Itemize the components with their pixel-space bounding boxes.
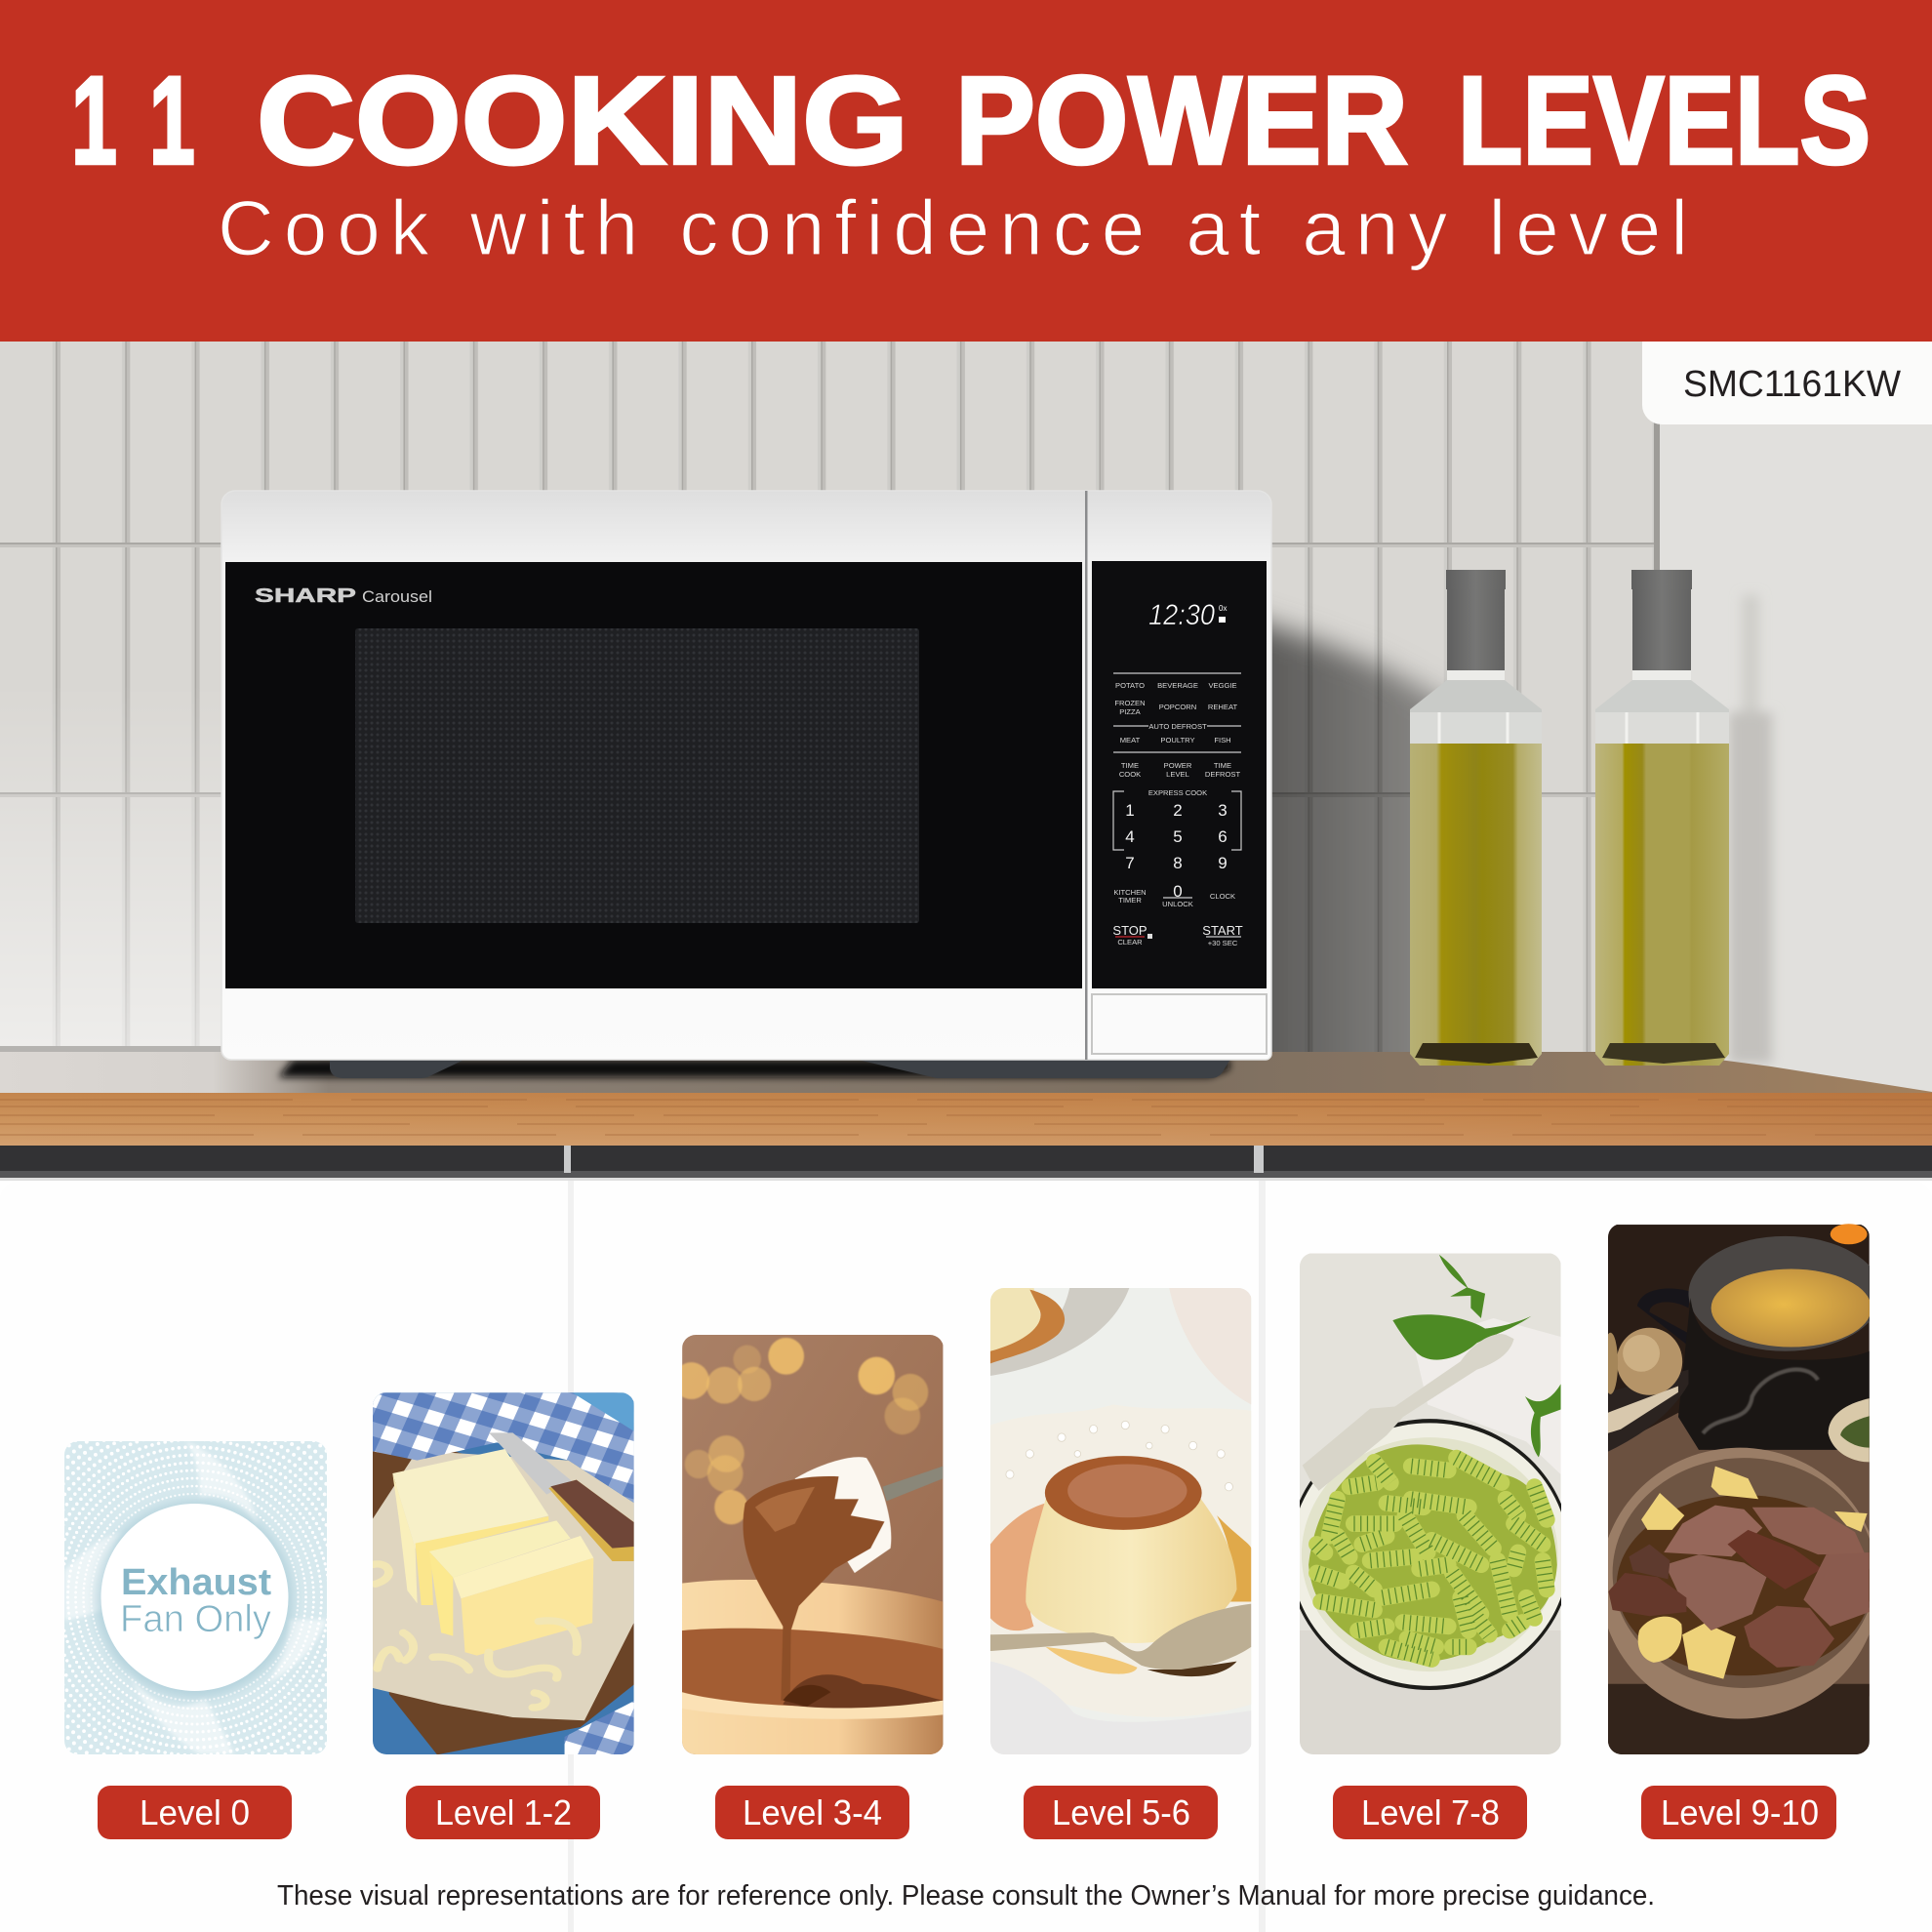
flame glow [1831,1224,1868,1244]
oil bottle left [1410,570,1542,1066]
title: COOKING [257,51,908,191]
pill: level 0 [98,1786,292,1839]
panel button labels: UNLOCK [1162,900,1193,908]
knife [489,1432,573,1495]
panel button labels: BEVERAGE [1157,681,1198,690]
bottom white panel [0,1181,1932,1932]
bowl [682,1580,943,1755]
pill: level 1-2 [406,1786,600,1839]
contact shadow under microwave [278,1060,1229,1077]
stop and start labels [1112,923,1243,938]
pill: level 7-8 [1333,1786,1527,1839]
brand logo: Carousel [362,587,432,606]
potatoes [1638,1467,1868,1679]
panel button labels: FROZEN [1114,699,1146,707]
microwave [221,491,1271,1078]
panel button labels: POULTRY [1160,736,1195,745]
oil bottle right [1595,570,1729,1066]
label: exhaust fan only: Fan Only [120,1598,271,1640]
card: flan photo [990,1288,1251,1755]
parchment [373,1451,634,1720]
keypad numbers: 9 [1218,854,1228,872]
tiled wall [0,342,1660,1054]
header band [0,0,1932,342]
dark table foreground [1608,1684,1870,1755]
radial dot pattern [64,1441,327,1754]
pasta spiral ridges [1316,1458,1547,1659]
label: exhaust fan only [123,1567,271,1639]
side cup [1829,1398,1870,1462]
title: POWER [955,51,1408,191]
stop and start labels: STOP [1112,923,1147,938]
level pills row [98,1786,1836,1839]
clock display: 0x [1219,604,1227,613]
pill: level 3-4 [715,1786,909,1839]
panel button labels: POTATO [1115,681,1145,690]
pot [1637,1236,1881,1450]
tray with bun [1603,1328,1688,1452]
caramel sauce [990,1503,1046,1630]
control panel [1092,561,1267,988]
panel button labels: +30 SEC [1208,939,1238,947]
pill: level 1-2: Level 1-2 [435,1792,572,1832]
metal shelf brackets [564,1146,1264,1173]
keypad numbers: 4 [1125,827,1135,846]
panel button labels: MEAT [1120,736,1141,745]
keypad numbers: 6 [1218,827,1228,846]
icon: lock [1147,934,1152,939]
panel button labels: VEGGIE [1208,681,1237,690]
embossed plate dots [1006,1421,1232,1491]
subtitle: Cook with confidence at any level [218,184,1688,271]
card: beef stew photo [1600,1224,1881,1755]
keypad numbers: 3 [1218,801,1228,820]
checked towel [373,1392,634,1503]
panel button labels: TIMER [1118,896,1142,905]
caramel top [1045,1456,1202,1530]
keypad numbers: 2 [1173,801,1183,820]
wooden counter edge [0,1093,1932,1146]
clock display: 12:30 [1148,599,1215,631]
label: exhaust fan only: Exhaust [121,1562,271,1603]
swirl highlights [64,1441,327,1754]
dark under-counter strip [0,1146,1932,1181]
panel button labels: REHEAT [1208,703,1237,711]
card: chocolate marshmallow photo [673,1335,943,1755]
panel button labels: POPCORN [1159,703,1196,711]
body [221,491,1271,1060]
fork [1303,1334,1514,1491]
keypad numbers: 5 [1173,827,1183,846]
napkin [1413,1318,1561,1474]
kitchen backdrop scene [0,342,1932,1181]
stew plate [1600,1448,1879,1719]
panel button labels: POWER [1164,761,1192,770]
panel divider lines [1113,673,1241,937]
panel button labels: PIZZA [1119,707,1142,716]
pill: level 0: Level 0 [140,1792,250,1832]
basil leaves [1392,1255,1561,1457]
door [225,562,1082,988]
panel button labels: CLEAR [1117,938,1143,946]
white circle [101,1504,289,1691]
bokeh lights [673,1338,928,1524]
keypad numbers [1125,801,1228,901]
brand logo [255,585,432,607]
cutting board [373,1444,634,1754]
panel button labels: CLOCK [1210,892,1235,901]
lower right panel outline [1092,994,1267,1054]
butter block [392,1449,548,1549]
steam [1703,1370,1818,1433]
microwave shadow on wall [1272,605,1444,1052]
panel button labels: TIME [1121,761,1139,770]
panel button labels: FISH [1214,736,1231,745]
napkin [990,1662,1251,1755]
pill: level 3-4: Level 3-4 [743,1792,882,1832]
panel button labels: EXPRESS COOK [1148,788,1207,797]
flan body [1026,1482,1237,1643]
pill: level 9-10: Level 9-10 [1661,1792,1819,1832]
panel button labels: AUTO DEFROST [1148,722,1207,731]
title: LEVELS [1458,51,1871,191]
pot soup [1711,1269,1872,1348]
keypad numbers: 0 [1173,882,1183,901]
keypad numbers: 7 [1125,854,1135,872]
model tag: SMC1161KW [1683,364,1901,405]
panel button labels: DEFROST [1205,770,1240,779]
melted chocolate [682,1629,943,1707]
card: butter photo [373,1392,634,1754]
panel button labels: LEVEL [1166,770,1189,779]
card: exhaust fan only [64,1441,327,1754]
pill: level 5-6: Level 5-6 [1052,1792,1190,1832]
card: pesto pasta photo [1288,1254,1571,1755]
counter top surface [0,1052,1932,1094]
background plate and flan [990,1288,1129,1376]
keypad numbers: 8 [1173,854,1183,872]
marshmallow [795,1457,891,1573]
keypad numbers: 1 [1125,801,1135,820]
panel button labels: KITCHEN [1113,888,1147,897]
spoon [990,1604,1251,1670]
model tag [1642,342,1932,424]
panel button labels: TIME [1214,761,1231,770]
butter curls [374,1564,577,1708]
pill: level 9-10 [1641,1786,1836,1839]
panel button labels: COOK [1119,770,1141,779]
brand logo: SHARP [255,585,356,607]
footnote: These visual representations are for reference only. Please consult the Owner’s Manual for more precise guidance. [277,1880,1655,1912]
feet [330,1058,1231,1078]
spoon handle [882,1467,943,1501]
beef pieces [1608,1506,1870,1668]
bowl [1288,1419,1571,1690]
pill: level 5-6 [1024,1786,1218,1839]
title: 11 [71,51,195,190]
door window mesh [355,628,919,923]
panel button labels [1113,681,1240,947]
plain side wall [1660,342,1932,1093]
chocolate coating [744,1476,884,1701]
circle shadow [96,1501,293,1698]
pill: level 7-8: Level 7-8 [1361,1792,1500,1832]
title [71,51,1871,191]
bottle shadows on wall [1729,595,1772,1064]
lace plate [990,1404,1251,1717]
pasta base [1308,1444,1557,1662]
stop and start labels: START [1202,923,1243,938]
pasta spirals [1316,1458,1547,1659]
